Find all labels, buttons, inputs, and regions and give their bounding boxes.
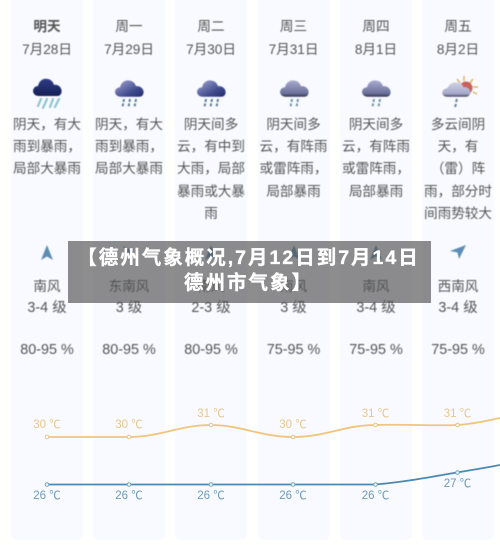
title line 1: 【德州气象概况,7月12日到7月14日 (77, 247, 420, 269)
wind direction: 南风 (362, 279, 390, 294)
low temperature line: 26 ℃ (279, 490, 307, 502)
low temperature line: 26 ℃ (33, 490, 61, 502)
low temperature line (33, 465, 500, 502)
icon: wind arrow (288, 245, 298, 260)
low temperature line: 26 ℃ (362, 490, 390, 502)
icon: sun behind cloud with rain (442, 75, 479, 108)
description: 雨到暴雨， (95, 139, 163, 154)
title banner (68, 241, 431, 303)
description (177, 116, 245, 221)
panel: 周三 7月31日 (258, 0, 330, 540)
icon: shower cloud (361, 80, 392, 107)
high temperature line: 31 ℃ (197, 408, 225, 420)
panel: 周二 7月30日 (175, 0, 247, 540)
description: 雨，部分时 (424, 184, 492, 199)
description (342, 116, 410, 199)
description: 阴天，有大 (13, 117, 81, 132)
panel: 周四 8月1日 (340, 0, 412, 540)
date: 7月29日 (104, 42, 154, 57)
description: 天，有 (438, 139, 478, 154)
description: 或雷阵雨， (342, 161, 410, 176)
panel: 明天 7月28日 (11, 0, 83, 540)
wind level: 2-3 级 (191, 300, 231, 316)
description: （雷）阵 (431, 161, 485, 176)
icon: wind arrow southwest (450, 244, 466, 260)
icon: wind arrow (370, 245, 382, 260)
humidity: 80-95 % (184, 342, 238, 358)
high temperature line: 30 ℃ (33, 419, 61, 431)
high temperature line: 30 ℃ (279, 419, 307, 431)
description: 雨 (204, 206, 218, 221)
date: 8月1日 (355, 42, 397, 57)
day label: 周四 (362, 19, 390, 34)
description: 云，有阵雨 (342, 139, 410, 154)
humidity: 75-95 % (349, 342, 403, 358)
description: 阴天间多 (184, 117, 238, 132)
date: 7月31日 (269, 42, 318, 57)
wind level: 3 级 (280, 300, 307, 316)
description: 云，有中到 (177, 139, 245, 154)
high temperature line (33, 408, 500, 439)
description (95, 116, 163, 176)
icon: wind arrow (205, 245, 215, 260)
description: 大雨，局部 (177, 161, 245, 176)
low temperature line: 27 ℃ (444, 478, 472, 490)
description: 局部暴雨 (349, 184, 403, 199)
high temperature line: 30 ℃ (115, 419, 143, 431)
description: 局部大暴雨 (95, 161, 163, 176)
day label: 周二 (197, 19, 225, 34)
date: 8月2日 (437, 42, 479, 57)
wind level: 3-4 级 (27, 300, 67, 316)
humidity: 75-95 % (431, 342, 485, 358)
wind level: 3-4 级 (438, 300, 478, 316)
day label: 周三 (280, 19, 307, 34)
description: 间雨势较大 (424, 206, 492, 221)
icon: rain cloud (114, 80, 144, 107)
icon: shower cloud (279, 80, 310, 107)
low temperature line: 26 ℃ (197, 490, 225, 502)
high temperature line: 31 ℃ (444, 408, 472, 420)
description: 阴天间多 (266, 117, 321, 132)
wind direction: 南风 (33, 279, 61, 294)
date: 7月30日 (186, 42, 236, 57)
panel: 周五 8月2日 (422, 0, 494, 540)
wind level: 3-4 级 (356, 300, 396, 316)
description: 局部暴雨 (266, 184, 321, 199)
wind level: 3 级 (116, 300, 142, 316)
description: 云，有阵雨 (260, 139, 327, 154)
humidity: 75-95 % (267, 342, 320, 358)
humidity: 80-95 % (102, 342, 156, 358)
low temperature line: 26 ℃ (115, 490, 143, 502)
wind direction: 西南风 (438, 279, 478, 294)
description: 阴天，有大 (95, 117, 163, 132)
icon: heavy rain cloud (32, 78, 62, 110)
title line 2: 德州市气象】 (184, 272, 313, 294)
description: 阴天间多 (349, 117, 403, 132)
humidity: 80-95 % (20, 342, 74, 358)
description (260, 116, 328, 199)
date: 7月28日 (22, 42, 72, 57)
description: 或雷阵雨， (260, 161, 327, 176)
description (424, 116, 492, 221)
panel: 周一 7月29日 (93, 0, 165, 540)
wind direction: 南风 (280, 279, 307, 294)
day label: 明天 (33, 19, 61, 34)
description (13, 116, 81, 176)
day label: 周五 (444, 19, 472, 34)
wind direction: 东南风 (109, 279, 149, 294)
high temperature line: 31 ℃ (362, 408, 390, 420)
icon: wind arrow southeast (123, 246, 135, 260)
description: 暴雨或大暴 (177, 184, 245, 199)
day label: 周一 (115, 19, 143, 34)
description: 局部大暴雨 (13, 161, 81, 176)
icon: wind arrow south (40, 244, 54, 260)
description: 雨到暴雨， (13, 139, 81, 154)
description: 多云间阴 (431, 117, 485, 132)
icon: rain cloud (196, 80, 226, 107)
wind direction: 南风 (197, 279, 225, 294)
